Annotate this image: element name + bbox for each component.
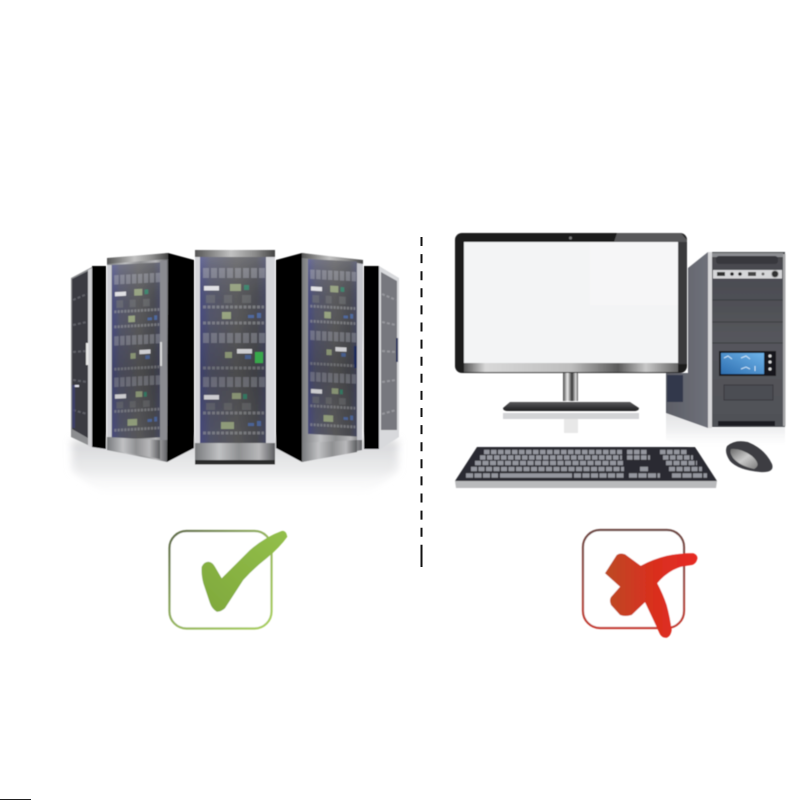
bottom edge mark xyxy=(0,799,31,800)
tower display xyxy=(719,351,776,376)
check mark xyxy=(202,531,287,612)
mouse xyxy=(726,441,772,472)
server rack: centre xyxy=(195,250,275,464)
check box outline xyxy=(170,531,272,628)
rejection cross badge xyxy=(583,530,697,638)
floor reflection under racks xyxy=(72,440,398,500)
cross box outline xyxy=(583,530,684,628)
server rack: inner right xyxy=(276,253,363,462)
server rack: far left xyxy=(71,266,106,449)
approval check mark badge xyxy=(170,531,287,628)
dashed divider xyxy=(420,237,422,567)
tower reflection xyxy=(666,413,785,450)
tower control strip xyxy=(713,270,782,278)
keyboard xyxy=(455,447,717,488)
monitor reflection xyxy=(503,413,639,419)
monitor stand xyxy=(563,372,578,401)
server racks illustration xyxy=(71,250,399,500)
cross mark xyxy=(605,553,697,638)
desktop computer illustration xyxy=(455,233,786,488)
server rack: inner left xyxy=(107,253,194,462)
monitor xyxy=(455,233,687,433)
server rack: far right xyxy=(364,266,399,450)
monitor screen xyxy=(464,242,678,363)
computer tower xyxy=(666,252,786,428)
